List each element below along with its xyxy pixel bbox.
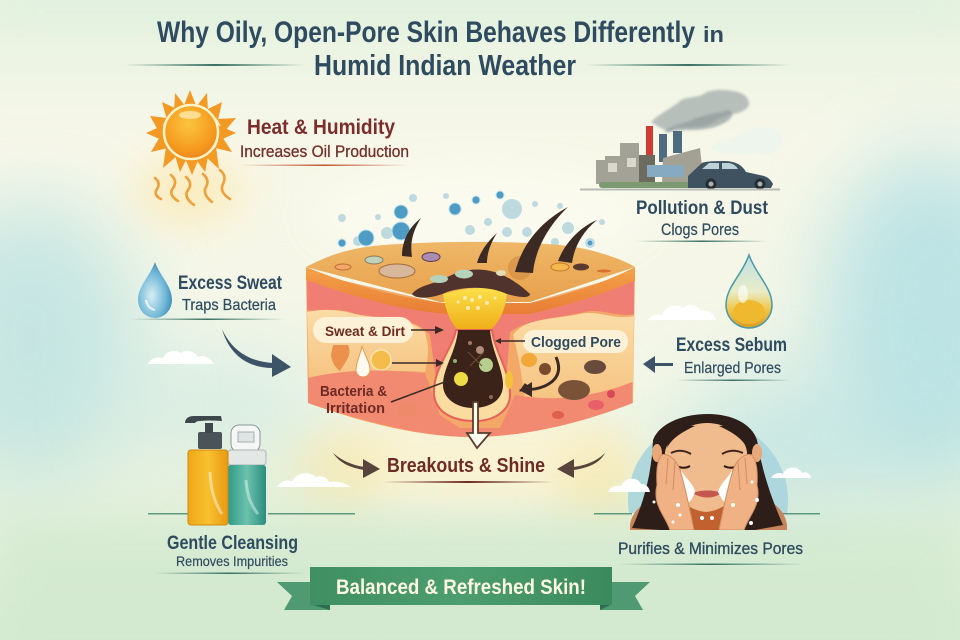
text: pollution and dust xyxy=(636,198,769,242)
arrows pointing at breakouts xyxy=(333,453,605,478)
surface oil bumps xyxy=(335,252,611,280)
label: clogged pore xyxy=(523,330,628,353)
clouds beside face xyxy=(608,467,811,492)
text: excess sebum: Enlarged Pores xyxy=(684,360,781,377)
text: gentle cleansing: Removes Impurities xyxy=(176,553,288,569)
icon: sweat drop xyxy=(138,262,172,318)
follicle halo xyxy=(434,330,510,421)
text: gentle cleansing xyxy=(153,533,305,574)
icon: woman washing face xyxy=(594,414,820,530)
icon: factory and car xyxy=(580,90,782,190)
label: bacteria and irritation: Bacteria & xyxy=(320,383,387,400)
text: pollution and dust: Pollution & Dust xyxy=(636,198,769,219)
label: bacteria and irritation xyxy=(320,383,387,417)
label: bacteria and irritation: Irritation xyxy=(326,400,385,417)
text: excess sebum: Excess Sebum xyxy=(676,335,787,356)
icon: cleanser bottles xyxy=(185,416,266,525)
arrow: sweat to skin xyxy=(222,329,291,377)
green line under bottles xyxy=(148,513,355,514)
label: sweat and dirt xyxy=(313,317,413,343)
title: in xyxy=(703,22,724,47)
text: heat and humidity: Heat & Humidity xyxy=(247,116,395,139)
arrow: white down arrow xyxy=(467,402,490,448)
pink epidermis xyxy=(307,280,634,408)
icon: sun with heat waves xyxy=(146,90,236,205)
text: excess sweat: Traps Bacteria xyxy=(182,297,276,314)
cream dermis left xyxy=(307,310,428,378)
title: Humid Indian Weather xyxy=(314,50,576,82)
text: gentle cleansing: Gentle Cleansing xyxy=(167,533,298,554)
sebum bubbles in plug xyxy=(456,295,496,310)
dark crust xyxy=(412,269,530,298)
orange lip xyxy=(306,267,635,314)
text: heat and humidity xyxy=(240,116,409,166)
text: excess sweat: Excess Sweat xyxy=(178,273,283,294)
ribbon banner xyxy=(277,567,650,610)
follicle contents xyxy=(453,341,513,399)
text: heat and humidity: Increases Oil Production xyxy=(240,142,409,161)
skin block base xyxy=(306,272,635,437)
clogged follicle xyxy=(443,330,503,408)
left layer icons xyxy=(331,345,391,377)
cloud near bottles xyxy=(277,473,351,487)
ribbon banner: Balanced & Refreshed Skin! xyxy=(336,576,586,599)
callout arrows inside skin xyxy=(391,326,559,402)
text: excess sebum xyxy=(676,335,791,381)
cloud left xyxy=(148,351,234,364)
icon: sebum drop xyxy=(726,255,772,328)
arrow: sebum to skin xyxy=(643,356,673,373)
text: pollution and dust: Clogs Pores xyxy=(661,220,739,239)
label: clogged pore: Clogged Pore xyxy=(531,334,621,351)
sweat bubbles xyxy=(338,191,605,248)
title: Why Oily, Open-Pore Skin Behaves Differently xyxy=(157,16,695,49)
title xyxy=(125,16,791,82)
pink lower layer xyxy=(308,371,632,437)
yellow sebum plug xyxy=(443,288,507,330)
cloud right xyxy=(648,305,716,320)
text: breakouts and shine: Breakouts & Shine xyxy=(387,455,545,477)
text: purifies and minimizes pores: Purifies & Minimizes Pores xyxy=(618,539,803,558)
hairs xyxy=(402,207,597,273)
text: excess sweat xyxy=(130,273,285,320)
skin cross-section xyxy=(306,207,635,437)
skin top surface xyxy=(306,242,635,302)
deep brown bumps xyxy=(397,353,615,419)
cream dermis right xyxy=(513,313,634,401)
label: sweat and dirt: Sweat & Dirt xyxy=(325,323,405,339)
